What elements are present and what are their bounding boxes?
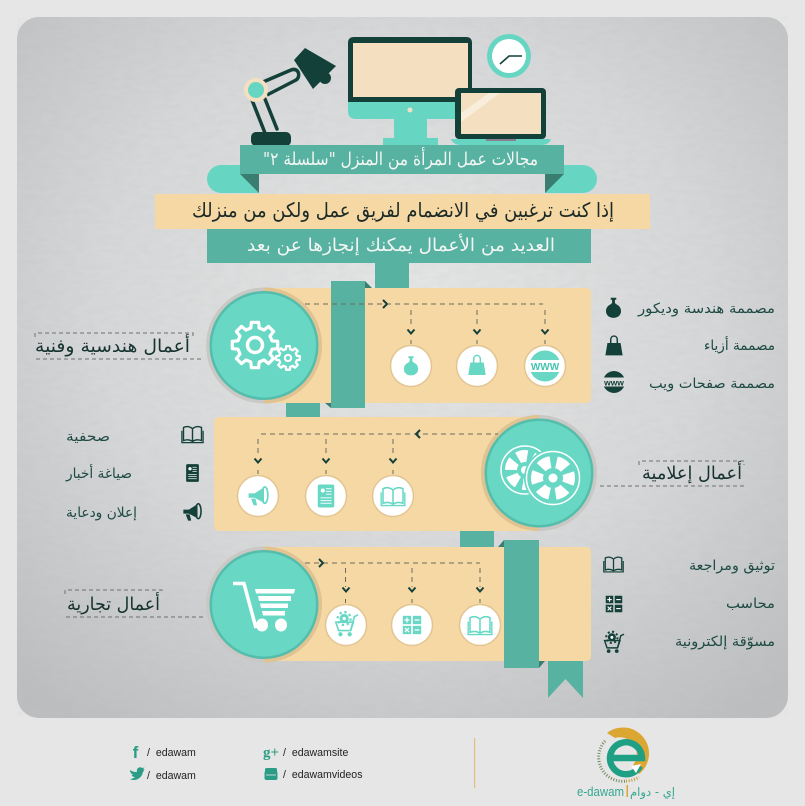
- item text: توثيق ومراجعة: [689, 558, 775, 574]
- circle icon: film reels: [481, 415, 597, 531]
- illustration: desktop monitor: [348, 37, 472, 146]
- circle icon: gears: [206, 288, 322, 404]
- illustration: wall clock: [487, 34, 531, 78]
- banner text: إذا كنت ترغبين في الانضمام لفريق عمل ولكن من منزلك: [192, 198, 614, 223]
- icon: www: [602, 371, 626, 393]
- title text: مجالات عمل المرأة من المنزل "سلسلة ٢": [263, 147, 538, 170]
- icon: book circle: [372, 476, 414, 516]
- title ribbon: [207, 145, 597, 193]
- icon: news circle: [306, 476, 346, 516]
- footer divider: [474, 738, 475, 788]
- side list: commerce: [604, 557, 775, 653]
- item text: مسوّقة إلكترونية: [675, 634, 775, 650]
- icon: calculator circle: [392, 604, 432, 646]
- icon: bag: [605, 336, 623, 355]
- icon: bag circle: [456, 346, 498, 386]
- flow lines: [258, 430, 498, 474]
- icon: vase circle: [390, 346, 432, 386]
- logo: e-dawam: [577, 727, 675, 800]
- category label: engineering: أعمال هندسية وفنية: [35, 334, 190, 357]
- icon: news: [186, 464, 199, 482]
- side list: media: [65, 427, 203, 521]
- flow lines: [305, 300, 545, 344]
- footer: social links: [130, 743, 362, 782]
- icon: www: www: [603, 378, 624, 388]
- icon: twitter: [130, 767, 144, 780]
- item text: مصممة هندسة وديكور: [637, 301, 775, 317]
- handle: facebook: / edawam: [147, 747, 196, 759]
- icon: megaphone: [183, 504, 201, 521]
- item text: صياغة أخبار: [65, 464, 132, 482]
- item text: مصممة صفحات ويب: [649, 376, 775, 392]
- category label: media: [600, 461, 744, 486]
- category label: commerce: [65, 590, 204, 617]
- icon: facebook: f: [133, 743, 139, 762]
- icon: book circle: [460, 604, 500, 646]
- icon: calculator: [606, 596, 622, 612]
- illustration: desk lamp: [244, 48, 336, 146]
- category label: commerce: أعمال تجارية: [67, 592, 160, 615]
- panel: engineering and art: [206, 281, 591, 417]
- cream banner: [155, 194, 650, 229]
- illustration: laptop: [451, 88, 551, 145]
- item text: محاسب: [726, 596, 775, 612]
- handle: youtube: / edawamvideos: [283, 769, 362, 781]
- category label: media: أعمال إعلامية: [642, 461, 742, 484]
- circle icon: shopping cart: [206, 546, 322, 662]
- icon: e-commerce circle: [326, 604, 366, 646]
- logo wordmark: e-dawam: [577, 785, 624, 799]
- flow lines: [305, 559, 480, 603]
- handle: google plus: / edawamsite: [283, 747, 348, 759]
- icon: book: [604, 557, 623, 572]
- icon: book: [182, 427, 203, 443]
- handle: twitter: / edawam: [147, 770, 196, 782]
- teal banner: [207, 229, 591, 289]
- icon: megaphone circle: [238, 476, 278, 516]
- panel: commerce: [206, 540, 591, 698]
- icon: google plus: g+: [263, 745, 279, 761]
- side list: engineering: [602, 298, 775, 393]
- icon: youtube: [264, 768, 278, 780]
- item text: صحفية: [66, 429, 110, 445]
- icon: www circle: WWW: [531, 362, 560, 373]
- icon: vase: [606, 298, 621, 318]
- logo arabic name: إي - دوام: [630, 785, 675, 800]
- icon: www circle: [524, 346, 566, 386]
- subtitle text: العديد من الأعمال يمكنك إنجازها عن بعد: [247, 234, 555, 256]
- logo separator: [626, 785, 628, 797]
- item text: مصممة أزياء: [704, 336, 775, 354]
- panel: media: [214, 415, 597, 547]
- icon: e-commerce cart: [605, 632, 624, 653]
- item text: إعلان ودعاية: [66, 505, 137, 521]
